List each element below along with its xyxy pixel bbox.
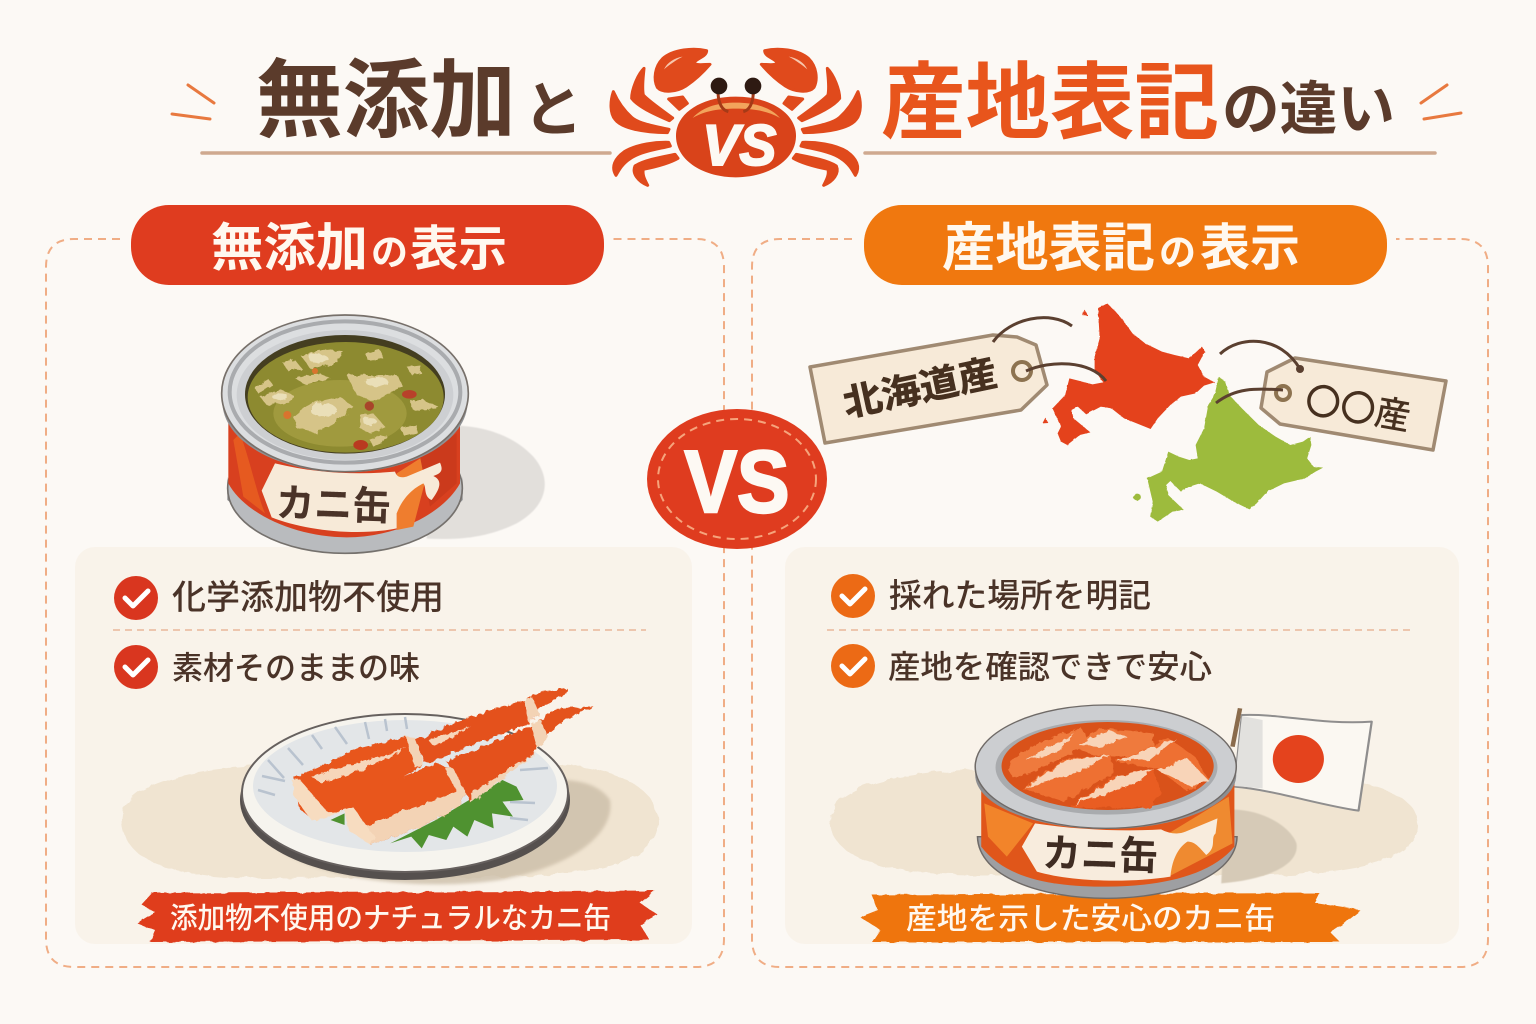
panel: origin label outline [752,239,1488,967]
title right suffix: の違い [1222,77,1395,142]
item: natural taste: 素材そのままの味 [172,650,420,686]
checklist: additive-free [113,576,646,689]
illustration: open can with green-tinted crab: カニ缶 [275,481,392,529]
icon: check [114,576,158,620]
heading pill: additive-free: 表示 [410,223,507,276]
item: catch location: 採れた場所を明記 [889,577,1151,614]
panel: additive-free outline [46,239,724,967]
icon: check [831,644,875,688]
title accent marks and underline [172,85,1461,153]
tag: other origin [1216,341,1446,450]
icon: crab with VS [611,49,860,185]
icon: check [114,645,158,689]
crab legs and leaf [292,688,594,848]
heading pill: origin label: 表示 [1200,220,1300,276]
tag: Hokkaido-produced: 北海道産 [840,352,1001,425]
VS badge [647,409,827,549]
illustration: Japan-origin can with flag [975,705,1372,898]
title [256,53,1395,150]
icon: check [831,574,875,618]
checklist: origin label [827,574,1415,688]
heading pill: origin label: の [1159,232,1196,273]
icon: crab with VS: VS [702,114,776,178]
plate [240,714,570,880]
map: red Hokkaido [1042,303,1215,445]
item: origin reassurance: 産地を確認できで安心 [888,649,1212,685]
banner: origin label [860,893,1360,942]
title left: additive-free: 無添加 [256,53,516,149]
title left particle: と [523,77,583,144]
item: no chemical additives: 化学添加物不使用 [172,579,444,617]
inner panel: additive-free [75,547,692,944]
illustration backdrop: beige brush stroke [830,769,1418,875]
tag: Hokkaido-produced [810,318,1106,443]
heading pill: origin label: 産地表記 [942,219,1155,278]
heading pill: additive-free: 無添加 [211,220,368,278]
inner panel: origin label [785,547,1459,944]
illustration: crab legs on plate [122,688,658,884]
heading pill: additive-free [131,205,604,285]
heading pill: additive-free: の [371,232,408,273]
illustration: open can with green-tinted crab [222,315,545,554]
banner: additive-free [137,891,658,942]
plate shadow [262,780,610,884]
heading pill: origin label [864,205,1387,285]
title right: origin label: 産地表記 [881,56,1219,150]
banner: origin label: 産地を示した安心のカニ缶 [906,903,1275,936]
banner: additive-free: 添加物不使用のナチュラルなカニ缶 [170,902,611,935]
map illustration with origin tags [810,303,1446,522]
tag: other origin: 〇〇産 [1302,379,1414,438]
beige brush background [122,764,658,878]
VS badge: VS [684,432,790,531]
illustration: Japan-origin can with flag: カニ缶 [1041,831,1159,879]
map: green Hokkaido [1133,377,1323,522]
